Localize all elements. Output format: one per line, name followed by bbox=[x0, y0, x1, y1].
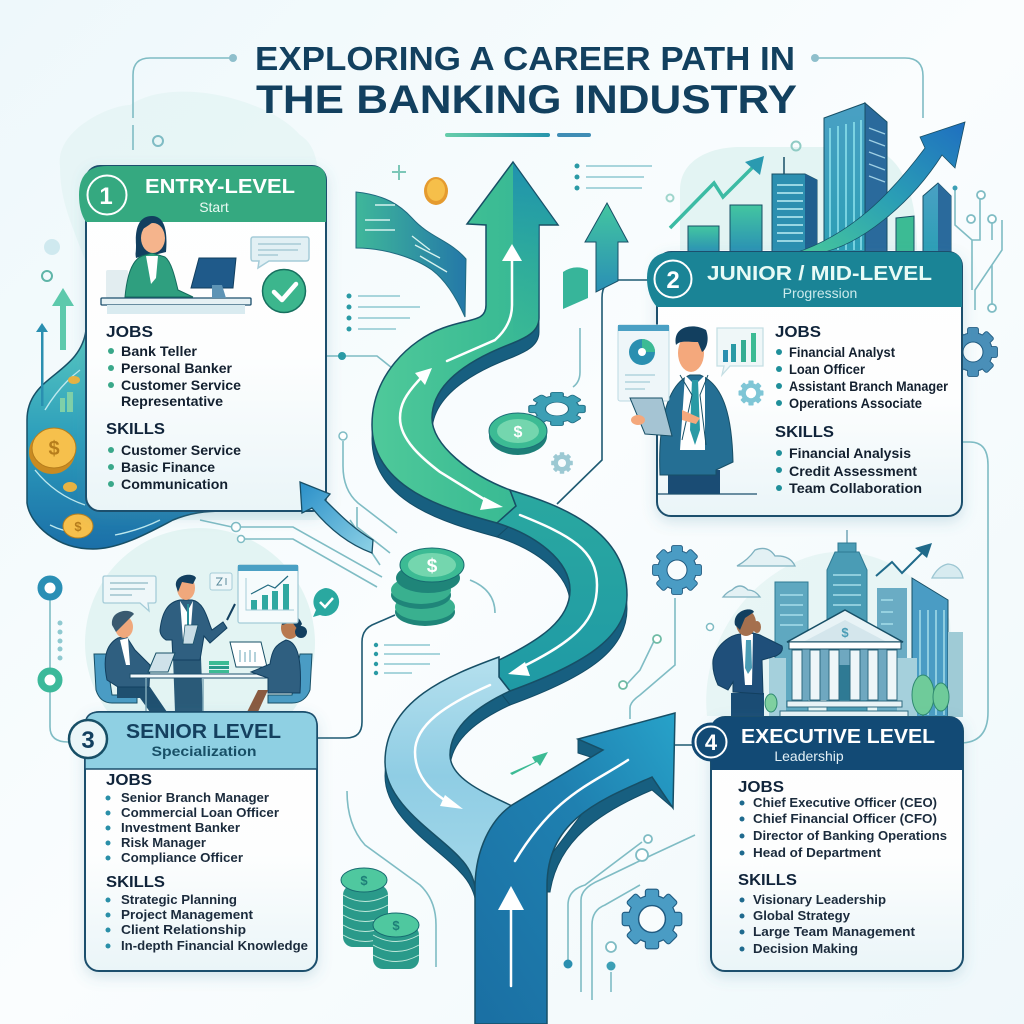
text: skills bbox=[738, 872, 916, 956]
illustration: trees bbox=[765, 675, 949, 716]
title underline bbox=[445, 133, 591, 137]
arrow: curved blue toward card 1 bbox=[300, 482, 373, 553]
connector nodes bbox=[232, 142, 996, 970]
icon: analytics bubble bbox=[717, 328, 763, 375]
icon: left timeline nodes bbox=[41, 579, 62, 689]
text: skills: Basic Finance bbox=[121, 459, 215, 475]
icon: plus bbox=[392, 165, 406, 180]
text: skills: SKILLS bbox=[775, 424, 834, 441]
text: jobs bbox=[775, 324, 948, 411]
number badge 3: 3 bbox=[81, 727, 95, 754]
road segment: teal bbox=[497, 490, 627, 691]
text: skills: Project Management bbox=[121, 907, 254, 922]
text: skills bbox=[775, 424, 922, 496]
text: jobs: Head of Department bbox=[753, 845, 882, 860]
header: junior / mid-level bbox=[647, 252, 962, 307]
number badge 1: 1 bbox=[99, 183, 113, 210]
subheading: progression: Progression bbox=[783, 285, 857, 301]
icon: flag document bbox=[356, 192, 466, 317]
text: jobs: JOBS bbox=[775, 324, 821, 341]
number badge 1 bbox=[88, 176, 126, 214]
text: jobs: Risk Manager bbox=[121, 835, 206, 850]
icon: gold coin top bbox=[424, 177, 448, 205]
text: jobs: Customer Service bbox=[121, 377, 241, 393]
title: EXPLORING A CAREER PATH IN bbox=[255, 40, 795, 77]
icon: green check bbox=[262, 270, 306, 312]
panel: card 4 executive level bbox=[692, 717, 963, 971]
icon: gear right of card 2 bbox=[949, 328, 997, 376]
illustration: tablet and hand bbox=[630, 398, 672, 436]
number badge 2: 2 bbox=[666, 267, 680, 294]
subheading: leadership: Leadership bbox=[774, 748, 844, 764]
text: jobs: Investment Banker bbox=[121, 820, 240, 835]
text: jobs bbox=[106, 324, 241, 409]
text: skills: Financial Analysis bbox=[789, 445, 911, 461]
heading: junior / mid-level: JUNIOR / MID-LEVEL bbox=[707, 263, 932, 285]
icon: coin stacks bottom: $ bbox=[392, 918, 400, 933]
text: skills: Visionary Leadership bbox=[753, 892, 886, 907]
road segment: green bbox=[372, 162, 558, 523]
number badge 4 bbox=[692, 724, 730, 760]
header: entry-level bbox=[79, 166, 326, 222]
number badge 4: 4 bbox=[705, 730, 718, 755]
text: skills: Large Team Management bbox=[753, 924, 916, 939]
illustration: bank building bbox=[780, 610, 908, 717]
illustration: wave with coins behind card 1 bbox=[27, 330, 225, 549]
number badge 3 bbox=[69, 720, 107, 758]
icon: coin stacks bottom bbox=[341, 868, 419, 969]
illustration: executive on phone bbox=[713, 609, 782, 718]
icon: small up arrow and block bbox=[563, 203, 628, 309]
text: jobs: Director of Banking Operations bbox=[753, 828, 947, 843]
heading: senior level: SENIOR LEVEL bbox=[126, 721, 281, 743]
icon: coin stack centre bbox=[391, 548, 464, 626]
text: jobs: Commercial Loan Officer bbox=[121, 805, 279, 820]
subheading: start: Start bbox=[199, 199, 229, 215]
text: jobs: JOBS bbox=[106, 324, 153, 341]
icon: teal check bubble bbox=[313, 588, 339, 617]
list: left of road bbox=[346, 294, 420, 332]
list: top center bbox=[574, 164, 652, 190]
illustration: city behind bank bbox=[769, 530, 963, 717]
list: below coin stack bbox=[374, 643, 440, 675]
illustration: wave with coins behind card 1: $ bbox=[74, 519, 82, 534]
illustration: wave with coins behind card 1: $ bbox=[48, 438, 60, 460]
subheading: specialization: Specialization bbox=[152, 743, 256, 759]
header: senior level bbox=[85, 712, 317, 769]
text: jobs: Bank Teller bbox=[121, 343, 198, 359]
text: skills: In-depth Financial Knowledge bbox=[121, 938, 308, 953]
road segment: blue with arrow head bbox=[475, 713, 675, 1024]
text: jobs: Assistant Branch Manager bbox=[789, 378, 948, 394]
text: jobs: Operations Associate bbox=[789, 395, 922, 411]
text: jobs: Financial Analyst bbox=[789, 344, 895, 360]
road lane markings bbox=[400, 260, 628, 986]
text: skills: SKILLS bbox=[738, 872, 797, 889]
text: jobs: Chief Executive Officer (CEO) bbox=[753, 795, 937, 810]
text: jobs bbox=[106, 772, 279, 865]
icon: coin stack centre: $ bbox=[427, 556, 438, 577]
text: skills: Credit Assessment bbox=[789, 463, 917, 479]
text: jobs: JOBS bbox=[106, 772, 152, 789]
panel: card 2 junior / mid-level bbox=[647, 252, 962, 516]
text: skills: SKILLS bbox=[106, 874, 165, 891]
title: THE BANKING INDUSTRY bbox=[256, 78, 797, 122]
text: jobs: Compliance Officer bbox=[121, 850, 243, 865]
icon: coin stacks bottom: $ bbox=[360, 873, 368, 888]
icon: gear above card 4 bbox=[653, 546, 701, 594]
illustration: skyline with growth arrows bbox=[670, 103, 965, 253]
icon: coin and gear near road bbox=[489, 393, 585, 474]
text: skills: Communication bbox=[121, 476, 228, 492]
panel: card 3 senior level bbox=[69, 712, 317, 971]
illustration: analyst with tablet bbox=[657, 326, 757, 494]
text: skills: Strategic Planning bbox=[121, 892, 237, 907]
icon: left up arrows bbox=[36, 239, 74, 406]
background blobs bbox=[60, 92, 955, 758]
illustration: bank building: $ bbox=[841, 625, 849, 640]
text: jobs: JOBS bbox=[738, 779, 784, 796]
text: skills: Decision Making bbox=[753, 941, 858, 956]
text: jobs: Personal Banker bbox=[121, 360, 233, 376]
text: skills: SKILLS bbox=[106, 421, 165, 438]
icon: meeting speech bubbles bbox=[103, 573, 232, 611]
text: skills bbox=[106, 421, 241, 492]
illustration: clouds and growth line bbox=[723, 543, 963, 597]
text: skills: Team Collaboration bbox=[789, 480, 922, 496]
number badge 2 bbox=[654, 260, 692, 298]
text: jobs: Representative bbox=[121, 393, 223, 409]
icon: whiteboard chart bbox=[238, 565, 298, 623]
title bbox=[255, 40, 797, 122]
road depth bbox=[372, 294, 673, 904]
icon: speech bubble bbox=[251, 237, 309, 268]
icon: gear bottom right bbox=[623, 890, 681, 948]
text: jobs: Senior Branch Manager bbox=[121, 790, 269, 805]
icon: small gear card 2 bbox=[739, 381, 763, 405]
connector lines bbox=[50, 188, 1002, 1000]
illustration: dashboard panel bbox=[618, 325, 669, 401]
text: skills: Customer Service bbox=[121, 442, 241, 458]
text: jobs: Loan Officer bbox=[789, 361, 865, 377]
header: executive level bbox=[711, 717, 963, 770]
text: jobs: Chief Financial Officer (CFO) bbox=[753, 811, 937, 826]
road: main winding path bbox=[372, 162, 675, 1024]
text: skills bbox=[106, 874, 308, 953]
text: skills: Global Strategy bbox=[753, 908, 851, 923]
icon: coin and gear near road: $ bbox=[514, 424, 523, 441]
top connector lines bbox=[133, 54, 923, 150]
heading: executive level: EXECUTIVE LEVEL bbox=[741, 726, 935, 748]
illustration: team meeting bbox=[94, 575, 312, 712]
road direction arrowheads bbox=[415, 244, 530, 910]
text: jobs bbox=[738, 779, 947, 860]
panel: card 1 entry-level bbox=[79, 166, 326, 511]
illustration: bank teller at desk bbox=[101, 216, 251, 314]
icon: small green arrow bbox=[510, 752, 548, 775]
arrow head tint bbox=[513, 163, 557, 342]
road segment: light blue bbox=[385, 657, 512, 895]
heading: entry-level: ENTRY-LEVEL bbox=[145, 176, 295, 198]
text: skills: Client Relationship bbox=[121, 922, 246, 937]
